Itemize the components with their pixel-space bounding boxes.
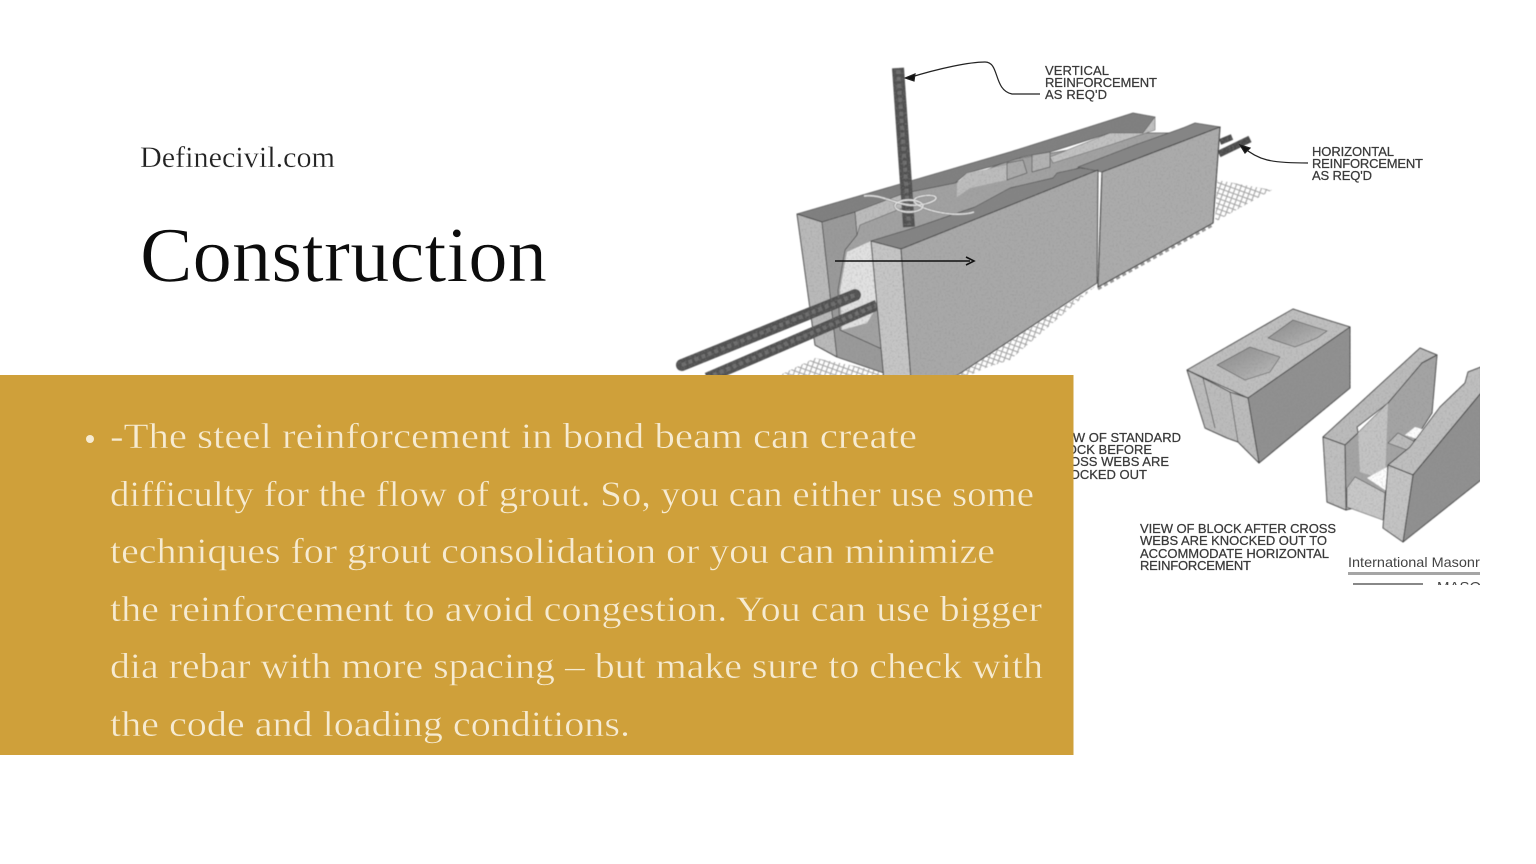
back wall recesses bbox=[957, 165, 1007, 197]
front wall top bbox=[871, 168, 1098, 249]
label: standard block: VIEW OF STANDARD bbox=[1052, 430, 1181, 445]
beam interior floor bbox=[822, 128, 1183, 373]
back wall end face bbox=[797, 214, 837, 357]
label: standard block: CROSS WEBS ARE bbox=[1051, 454, 1169, 469]
body text: the code and loading conditions. bbox=[110, 704, 630, 744]
label: standard block bbox=[1074, 432, 1180, 480]
body text: difficulty for the flow of grout. So, you can either use some bbox=[110, 474, 1034, 514]
serrated ground edge bbox=[1098, 225, 1213, 289]
label: horizontal reinforcement: HORIZONTAL bbox=[1312, 144, 1394, 159]
bullet bbox=[86, 435, 94, 443]
vertical rebar bbox=[898, 68, 909, 227]
panel: text block bbox=[0, 375, 1074, 755]
label: block after knockout: WEBS ARE KNOCKED OUT TO bbox=[1140, 533, 1327, 548]
knocked-out block bbox=[1323, 348, 1481, 542]
source credit bbox=[1348, 557, 1480, 585]
title: Construction bbox=[140, 211, 547, 298]
label: standard block: BLOCK BEFORE bbox=[1051, 442, 1152, 457]
body text: -The steel reinforcement in bond beam can create bbox=[110, 416, 917, 456]
source credit: MASON bbox=[1437, 579, 1492, 596]
body text: techniques for grout consolidation or you can minimize bbox=[110, 531, 995, 571]
label: block after knockout: ACCOMMODATE HORIZONTAL bbox=[1140, 546, 1329, 561]
label: vertical reinforcement: AS REQ'D bbox=[1045, 87, 1107, 102]
front block face bbox=[901, 170, 1098, 380]
label: horizontal reinforcement: REINFORCEMENT bbox=[1312, 156, 1423, 171]
diagram: bond beam bbox=[682, 68, 1272, 380]
back wall top band bbox=[797, 113, 1155, 222]
body text bbox=[110, 416, 1043, 744]
right block face bbox=[1098, 127, 1220, 287]
site name: Definecivil.com bbox=[140, 141, 335, 174]
label: block after knockout bbox=[1140, 521, 1336, 573]
label: block after knockout: REINFORCEMENT bbox=[1140, 558, 1251, 573]
label: vertical reinforcement: REINFORCEMENT bbox=[1045, 75, 1157, 90]
bright cavity bbox=[840, 241, 878, 330]
body text: dia rebar with more spacing – but make sure to check with bbox=[110, 646, 1043, 686]
label: block after knockout: VIEW OF BLOCK AFTER CROSS bbox=[1140, 521, 1336, 536]
label: horizontal reinforcement: AS REQ'D bbox=[1312, 168, 1372, 183]
diagram: bond beam and blocks bbox=[682, 62, 1492, 596]
body text: the reinforcement to avoid congestion. You can use bigger bbox=[110, 589, 1042, 629]
far rebars bbox=[1220, 137, 1232, 142]
callout arrows bbox=[905, 62, 1308, 163]
horizontal rebars bbox=[707, 305, 877, 378]
front block end bbox=[871, 241, 911, 380]
wire tie bbox=[887, 194, 958, 216]
ground mesh bbox=[780, 180, 1272, 380]
label: horizontal reinforcement bbox=[1312, 144, 1423, 183]
label: vertical reinforcement bbox=[1045, 63, 1157, 102]
label: standard block: KNOCKED OUT bbox=[1052, 467, 1147, 482]
standard block bbox=[1187, 309, 1350, 463]
label: vertical reinforcement: VERTICAL bbox=[1045, 63, 1109, 78]
source credit: International Masonry bbox=[1348, 554, 1487, 570]
pointer line across beam bbox=[835, 257, 974, 265]
